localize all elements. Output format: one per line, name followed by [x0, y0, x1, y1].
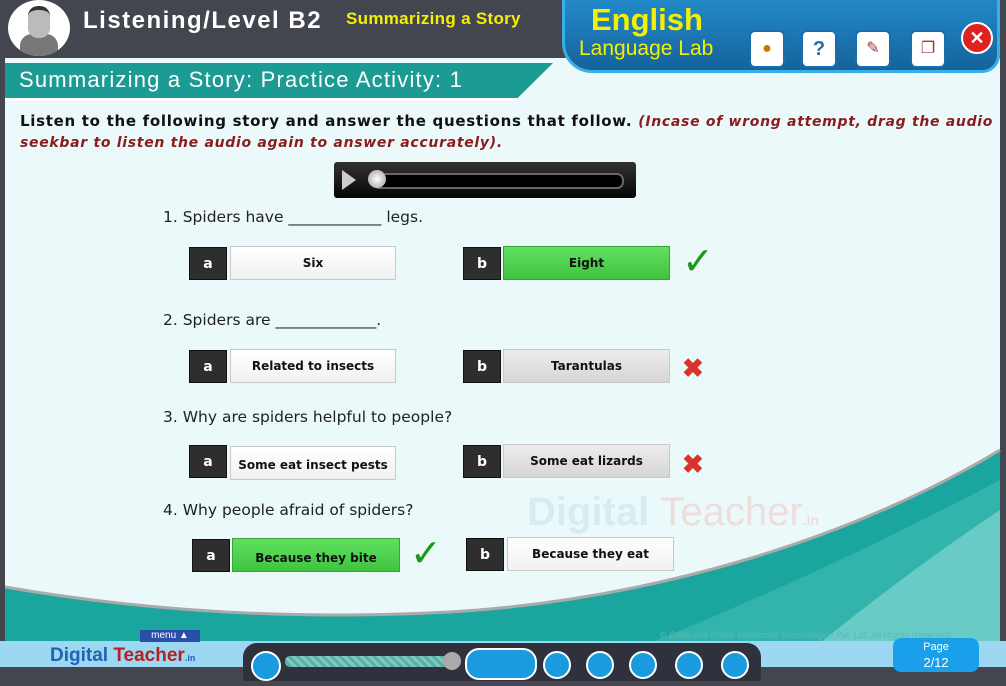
question 1: 1. Spiders have ____________ legs. [163, 208, 423, 226]
text: ✖ [682, 353, 704, 383]
page indicator: Page [923, 641, 949, 653]
panel: English Language Lab [562, 0, 1000, 73]
question 3: 3. Why are spiders helpful to people? [163, 408, 452, 426]
banner: activity title: Summarizing a Story: Practice Activity: 1 [19, 67, 463, 92]
watermark: Digital Teacher.in [527, 490, 819, 534]
text: b [477, 256, 487, 272]
audio player [334, 162, 636, 198]
logo: Digital Teacher: menu ▲ [151, 630, 189, 641]
icon: avatar [8, 0, 70, 56]
text: Six [303, 256, 323, 270]
question 4: 4. Why people afraid of spiders? [163, 501, 413, 519]
text: b [480, 547, 490, 563]
text: a [206, 548, 216, 564]
text: ✖ [682, 449, 704, 479]
logo: Digital Teacher [50, 630, 200, 666]
text: Some eat lizards [530, 454, 643, 468]
text: a [203, 256, 213, 272]
question 2: 2. Spiders are _____________. [163, 311, 381, 329]
text: a [203, 454, 213, 470]
text: a [203, 359, 213, 375]
text: Eight [569, 256, 604, 270]
banner: activity title [5, 63, 553, 101]
panel: English Language Lab: ? [813, 38, 825, 60]
text: b [477, 359, 487, 375]
panel: English Language Lab: English [591, 2, 703, 37]
page indicator: 2/12 [923, 655, 949, 670]
text: Tarantulas [551, 359, 622, 373]
panel: English Language Lab: Language Lab [579, 37, 713, 60]
heading: topic: Summarizing a Story [346, 9, 521, 28]
heading: level: Listening/Level B2 [83, 7, 322, 34]
text: ✓ [682, 241, 714, 283]
top header [8, 0, 521, 56]
page indicator [893, 638, 979, 672]
text: b [477, 454, 487, 470]
instructions: Listen to the following story and answer the questions that follow. (Incase of wrong attempt, drag the audio seekbar to listen the audio again to answer accurately). [20, 112, 993, 151]
icon: close: ✕ [969, 28, 985, 48]
icon: close [961, 22, 993, 54]
control bar [243, 643, 761, 681]
icons: toolbar [749, 30, 785, 68]
text: Because they eat [532, 547, 649, 561]
text: Some eat insect pests [238, 458, 388, 472]
text: Because they bite [255, 551, 377, 565]
text: ✓ [410, 533, 442, 575]
panel: English Language Lab: ✎ [866, 40, 880, 57]
icons: toolbar: ● [762, 40, 772, 57]
logo: Digital Teacher: Digital Teacher.in [50, 645, 195, 666]
copyright: © Code and Pixels Interactive Technologies Pvt. Ltd. All Rights Reserved. [660, 630, 953, 640]
panel: English Language Lab: ❐ [921, 40, 935, 57]
text: Related to insects [252, 359, 374, 373]
